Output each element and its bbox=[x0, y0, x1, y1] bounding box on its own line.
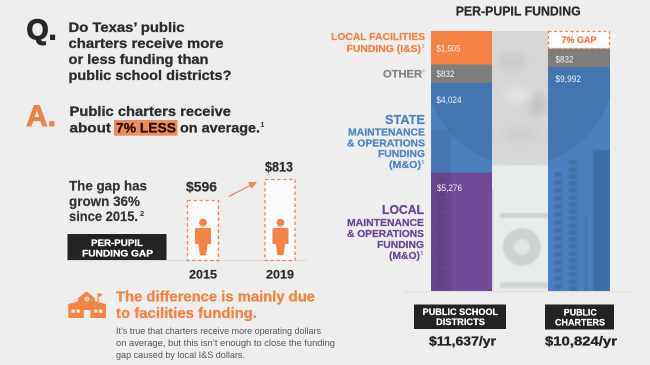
gap growth text: grown 36% bbox=[69, 193, 141, 209]
dollar bill texture on bars bbox=[431, 67, 610, 291]
callout heading: The difference is mainly due bbox=[116, 289, 315, 306]
callout: facilities funding bbox=[116, 289, 335, 361]
answer text: on average. bbox=[180, 120, 260, 136]
label: state M&amp;O funding bbox=[347, 112, 425, 171]
question text: charters receive more bbox=[68, 35, 224, 51]
column label: public school districts bbox=[414, 304, 506, 349]
question text: public school districts? bbox=[68, 67, 232, 83]
callout body: on average, but this isn’t enough to close the funding bbox=[116, 338, 335, 349]
icon: school bbox=[68, 291, 106, 318]
2019 bar: $813 bbox=[265, 160, 293, 174]
label: local M&amp;O funding bbox=[347, 202, 424, 262]
question text bbox=[68, 19, 232, 83]
label: local M&amp;O funding: (M&O) bbox=[389, 250, 420, 262]
bar value labels bbox=[436, 44, 581, 194]
2019 bar bbox=[265, 160, 295, 282]
growth arrow bbox=[229, 182, 257, 196]
label: local M&amp;O funding: 5 bbox=[420, 251, 424, 257]
column label: public school districts: $11,637/yr bbox=[429, 334, 496, 349]
stacked bar: public charters bbox=[548, 32, 610, 291]
Q letter: Q. bbox=[26, 14, 56, 46]
question block bbox=[26, 14, 232, 83]
callout body bbox=[116, 326, 335, 361]
answer text: 7% LESS bbox=[116, 120, 176, 136]
label: state M&amp;O funding: STATE bbox=[385, 112, 425, 127]
label: local facilities funding: FUNDING (I&S) bbox=[346, 43, 421, 55]
axis baseline bbox=[404, 291, 633, 292]
2015 bar: $596 bbox=[186, 180, 217, 194]
label: state M&amp;O funding: FUNDING bbox=[378, 148, 425, 160]
gap growth text: 2 bbox=[140, 209, 144, 218]
7% gap box bbox=[548, 32, 610, 48]
segment: local facilities bbox=[431, 31, 492, 64]
bar value labels: $1,505 bbox=[436, 44, 460, 54]
label: local M&amp;O funding: FUNDING bbox=[377, 239, 424, 251]
2019 bar: 2019 bbox=[266, 270, 294, 282]
segment: other bbox=[431, 64, 492, 83]
dollar bill background strip bbox=[492, 31, 548, 290]
label: state M&amp;O funding: & OPERATIONS bbox=[347, 138, 425, 150]
callout heading: to facilities funding. bbox=[116, 305, 257, 322]
column label: public charters bbox=[545, 304, 617, 349]
gap growth text: since 2015. bbox=[69, 208, 138, 224]
per-pupil funding gap label: FUNDING GAP bbox=[82, 248, 154, 260]
A letter: A. bbox=[26, 100, 56, 133]
answer block bbox=[26, 100, 264, 136]
callout body: gap caused by local I&S dollars. bbox=[116, 350, 245, 361]
column label: public school districts: PUBLIC SCHOOL bbox=[423, 307, 499, 317]
column label: public charters: $10,824/yr bbox=[545, 334, 617, 349]
label: state M&amp;O funding: MAINTENANCE bbox=[348, 127, 425, 139]
bar value labels: $9,992 bbox=[556, 74, 581, 85]
question text: Do Texas’ public bbox=[68, 19, 185, 35]
chart title: PER-PUPIL FUNDING bbox=[456, 4, 581, 18]
per-pupil funding gap label: PER-PUPIL bbox=[91, 238, 143, 249]
callout heading bbox=[116, 289, 315, 322]
question text: or less funding than bbox=[68, 51, 208, 67]
label: state M&amp;O funding: 5 bbox=[422, 160, 424, 166]
2015 bar bbox=[186, 180, 218, 282]
gap chart bbox=[68, 160, 307, 282]
segment: local M&amp;O bbox=[431, 172, 492, 291]
gap growth text: The gap has bbox=[69, 178, 147, 194]
bar value labels: $832 bbox=[436, 69, 454, 80]
per-pupil funding gap label bbox=[68, 234, 166, 260]
segment: state M&amp;O bbox=[431, 83, 492, 172]
label: local M&amp;O funding: MAINTENANCE bbox=[347, 217, 424, 229]
bar value labels: $4,024 bbox=[436, 95, 462, 106]
column label: public charters: CHARTERS bbox=[555, 317, 605, 327]
label: local M&amp;O funding: & OPERATIONS bbox=[347, 228, 424, 240]
answer text: 1 bbox=[260, 122, 264, 129]
label: other: OTHER bbox=[383, 68, 422, 80]
bar value labels: $832 bbox=[556, 54, 574, 66]
segment: other bbox=[548, 48, 610, 67]
stacked bar: public school districts bbox=[431, 31, 492, 291]
gap growth text bbox=[69, 178, 147, 224]
7% gap label: 7% GAP bbox=[562, 35, 597, 46]
label: local facilities funding: 3 bbox=[422, 44, 424, 50]
column label: public school districts: DISTRICTS bbox=[436, 317, 485, 327]
answer text: Public charters receive bbox=[70, 103, 231, 119]
answer text: about bbox=[70, 120, 111, 136]
label: local M&amp;O funding: LOCAL bbox=[382, 202, 424, 217]
column label: public charters: PUBLIC bbox=[564, 307, 597, 317]
2015 bar: 2015 bbox=[189, 270, 218, 282]
answer highlight bbox=[114, 120, 178, 136]
label: other: 4 bbox=[422, 69, 425, 75]
label: local facilities funding bbox=[331, 31, 425, 55]
label: local facilities funding: LOCAL FACILITIES bbox=[331, 31, 425, 43]
callout body: It’s true that charters receive more operating dollars bbox=[116, 326, 321, 337]
label: state M&amp;O funding: (M&O) bbox=[389, 159, 421, 171]
bar value labels: $5,276 bbox=[437, 183, 462, 194]
answer text bbox=[70, 103, 264, 136]
segment: state M&amp;O bbox=[548, 67, 610, 291]
